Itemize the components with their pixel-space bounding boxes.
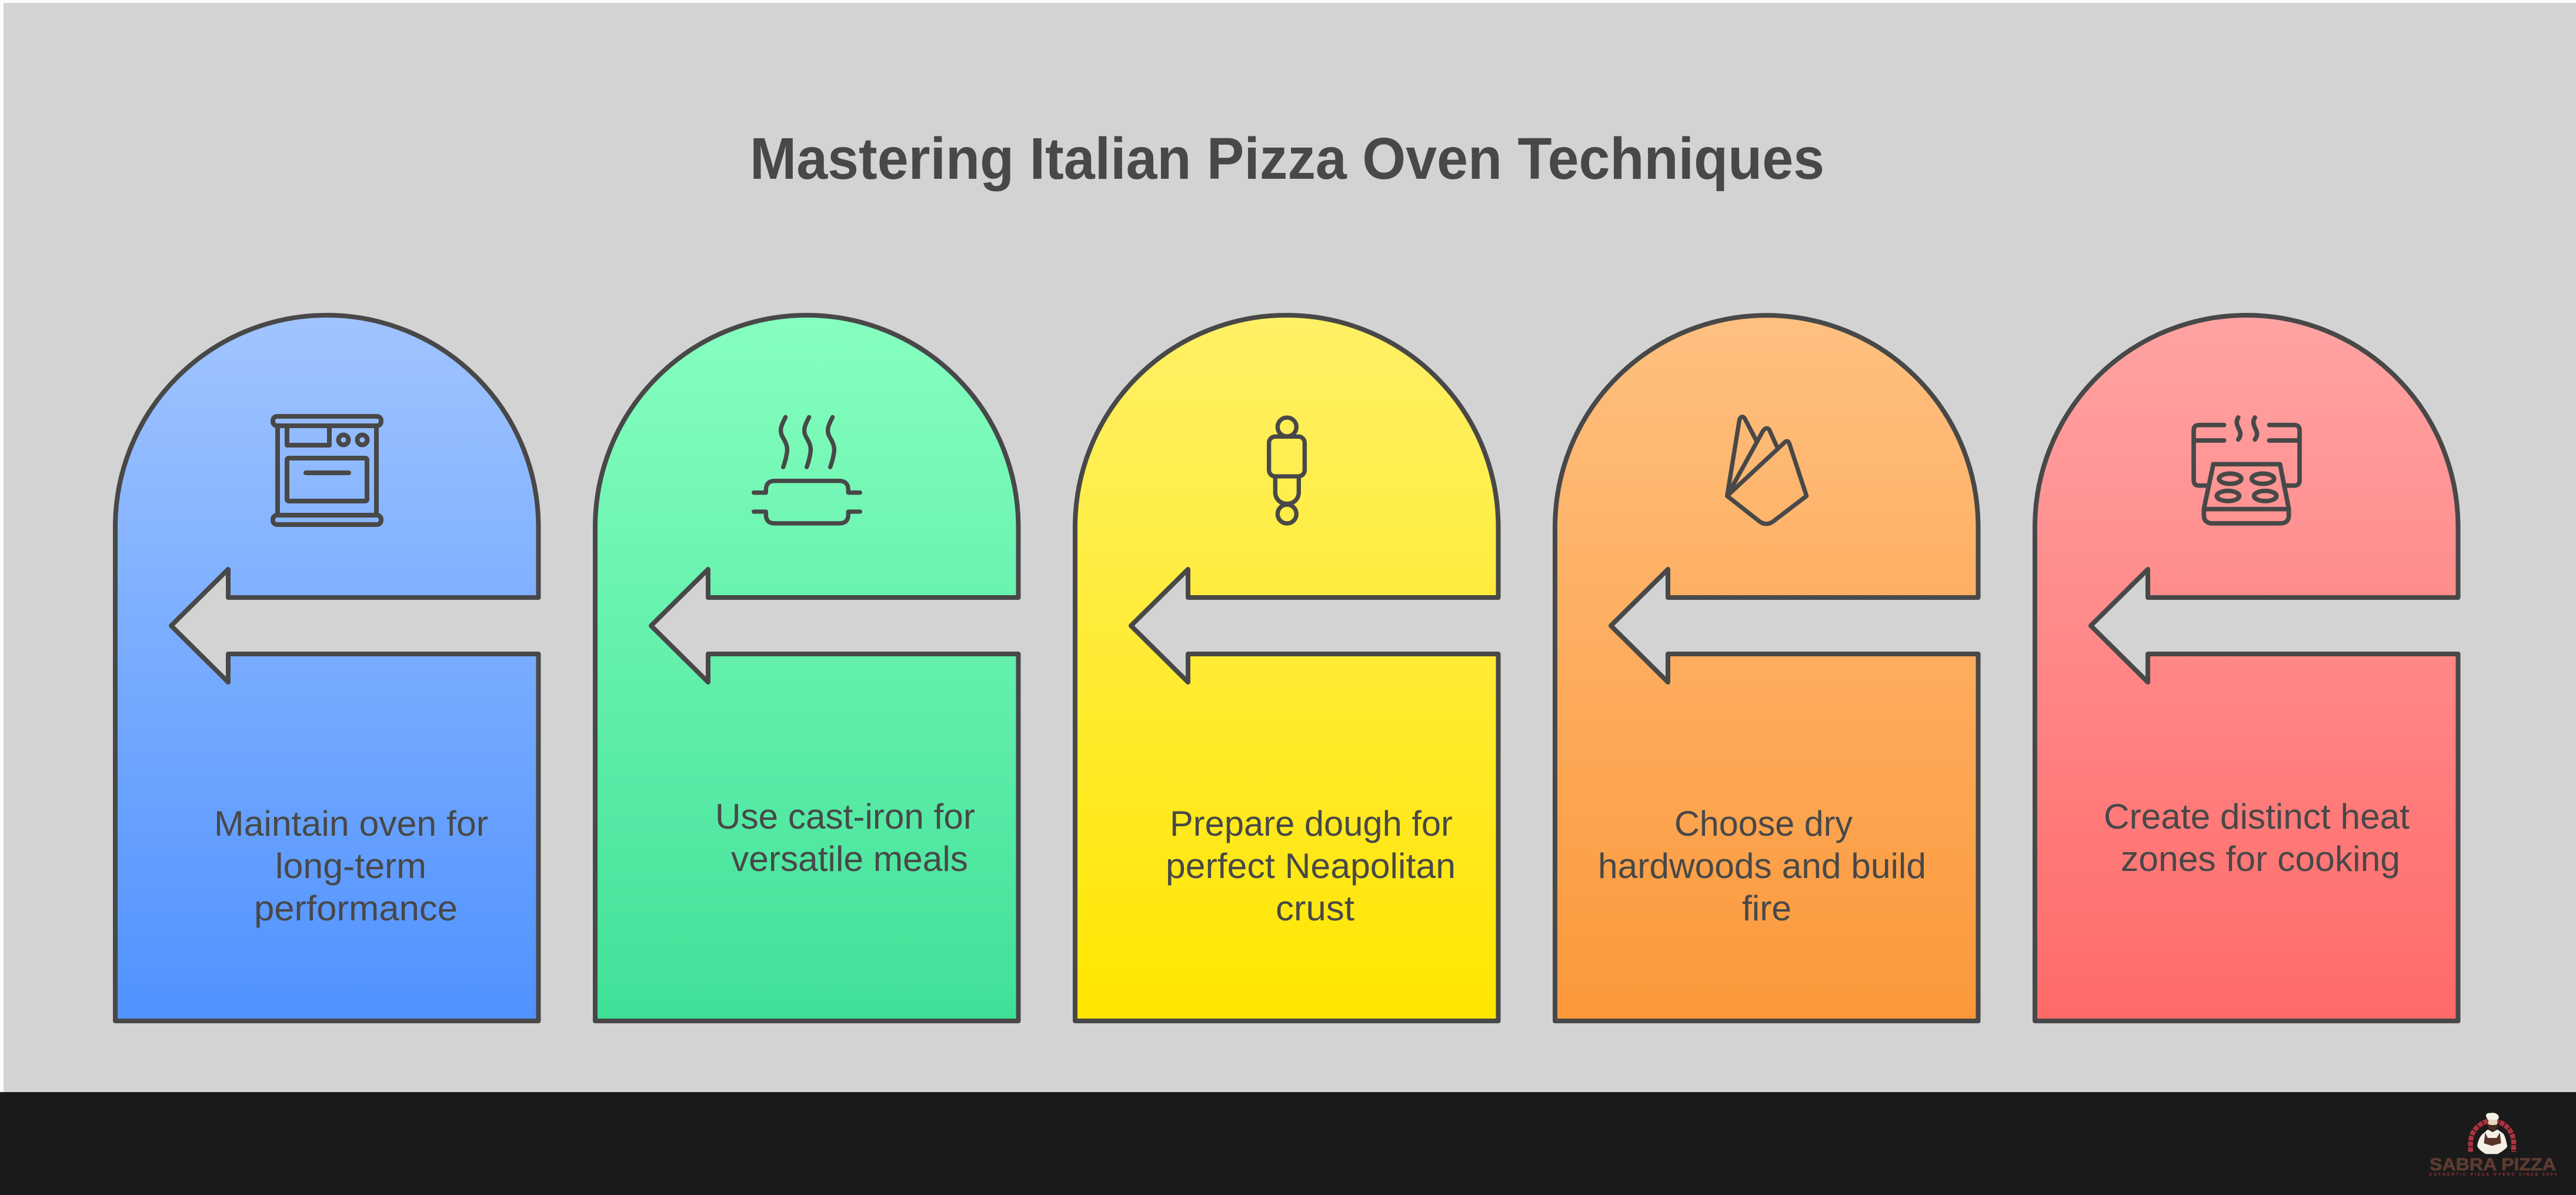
label: dry hardwoods: Choose dry	[1674, 804, 1853, 843]
label: dry hardwoods: fire	[1742, 889, 1791, 928]
panel: dry hardwoods	[1555, 315, 1978, 1021]
label: maintain oven: long-term	[275, 846, 426, 886]
label: heat zones	[2104, 797, 2410, 879]
icon: flame	[1727, 417, 1807, 524]
icon: brick arch and chef	[2471, 1113, 2514, 1154]
panel: prepare dough	[1075, 315, 1499, 1021]
tagline: AUTHENTIC PIZZA OVENS SINCE 2004	[2429, 1173, 2557, 1177]
label: cast-iron: versatile meals	[731, 839, 968, 879]
label: dry hardwoods	[1598, 804, 1926, 928]
icon: oven with baking tray	[2194, 418, 2300, 523]
logo: Sabra Pizza	[2429, 1113, 2557, 1177]
icon: oven	[273, 416, 381, 525]
title: Mastering Italian Pizza Oven Techniques	[750, 126, 1824, 192]
label: prepare dough: crust	[1276, 889, 1354, 928]
label: dry hardwoods: hardwoods and build	[1598, 846, 1926, 886]
arch with arrow cutout	[2035, 315, 2458, 1021]
label: prepare dough: perfect Neapolitan	[1166, 846, 1456, 886]
icon: dough figure	[1269, 418, 1304, 523]
label: heat zones: zones for cooking	[2121, 839, 2400, 879]
label: cast-iron: Use cast-iron for	[715, 797, 975, 836]
label: maintain oven	[214, 804, 488, 928]
label: maintain oven: Maintain oven for	[214, 804, 488, 843]
arch with arrow cutout	[595, 315, 1019, 1021]
icon: steaming cast-iron pan	[754, 417, 860, 523]
label: cast-iron	[715, 797, 975, 879]
label: prepare dough	[1166, 804, 1456, 928]
label: prepare dough: Prepare dough for	[1170, 804, 1453, 843]
label: maintain oven: performance	[254, 889, 458, 928]
arch with arrow cutout	[1555, 315, 1978, 1021]
arch with arrow cutout	[115, 315, 539, 1021]
wordmark: SABRA PIZZA	[2430, 1155, 2556, 1174]
panel: maintain oven	[115, 315, 539, 1021]
label: heat zones: Create distinct heat	[2104, 797, 2410, 836]
footer bar	[0, 1092, 2576, 1195]
panel: cast-iron	[595, 315, 1019, 1021]
panel: heat zones	[2035, 315, 2458, 1021]
arch with arrow cutout	[1075, 315, 1499, 1021]
